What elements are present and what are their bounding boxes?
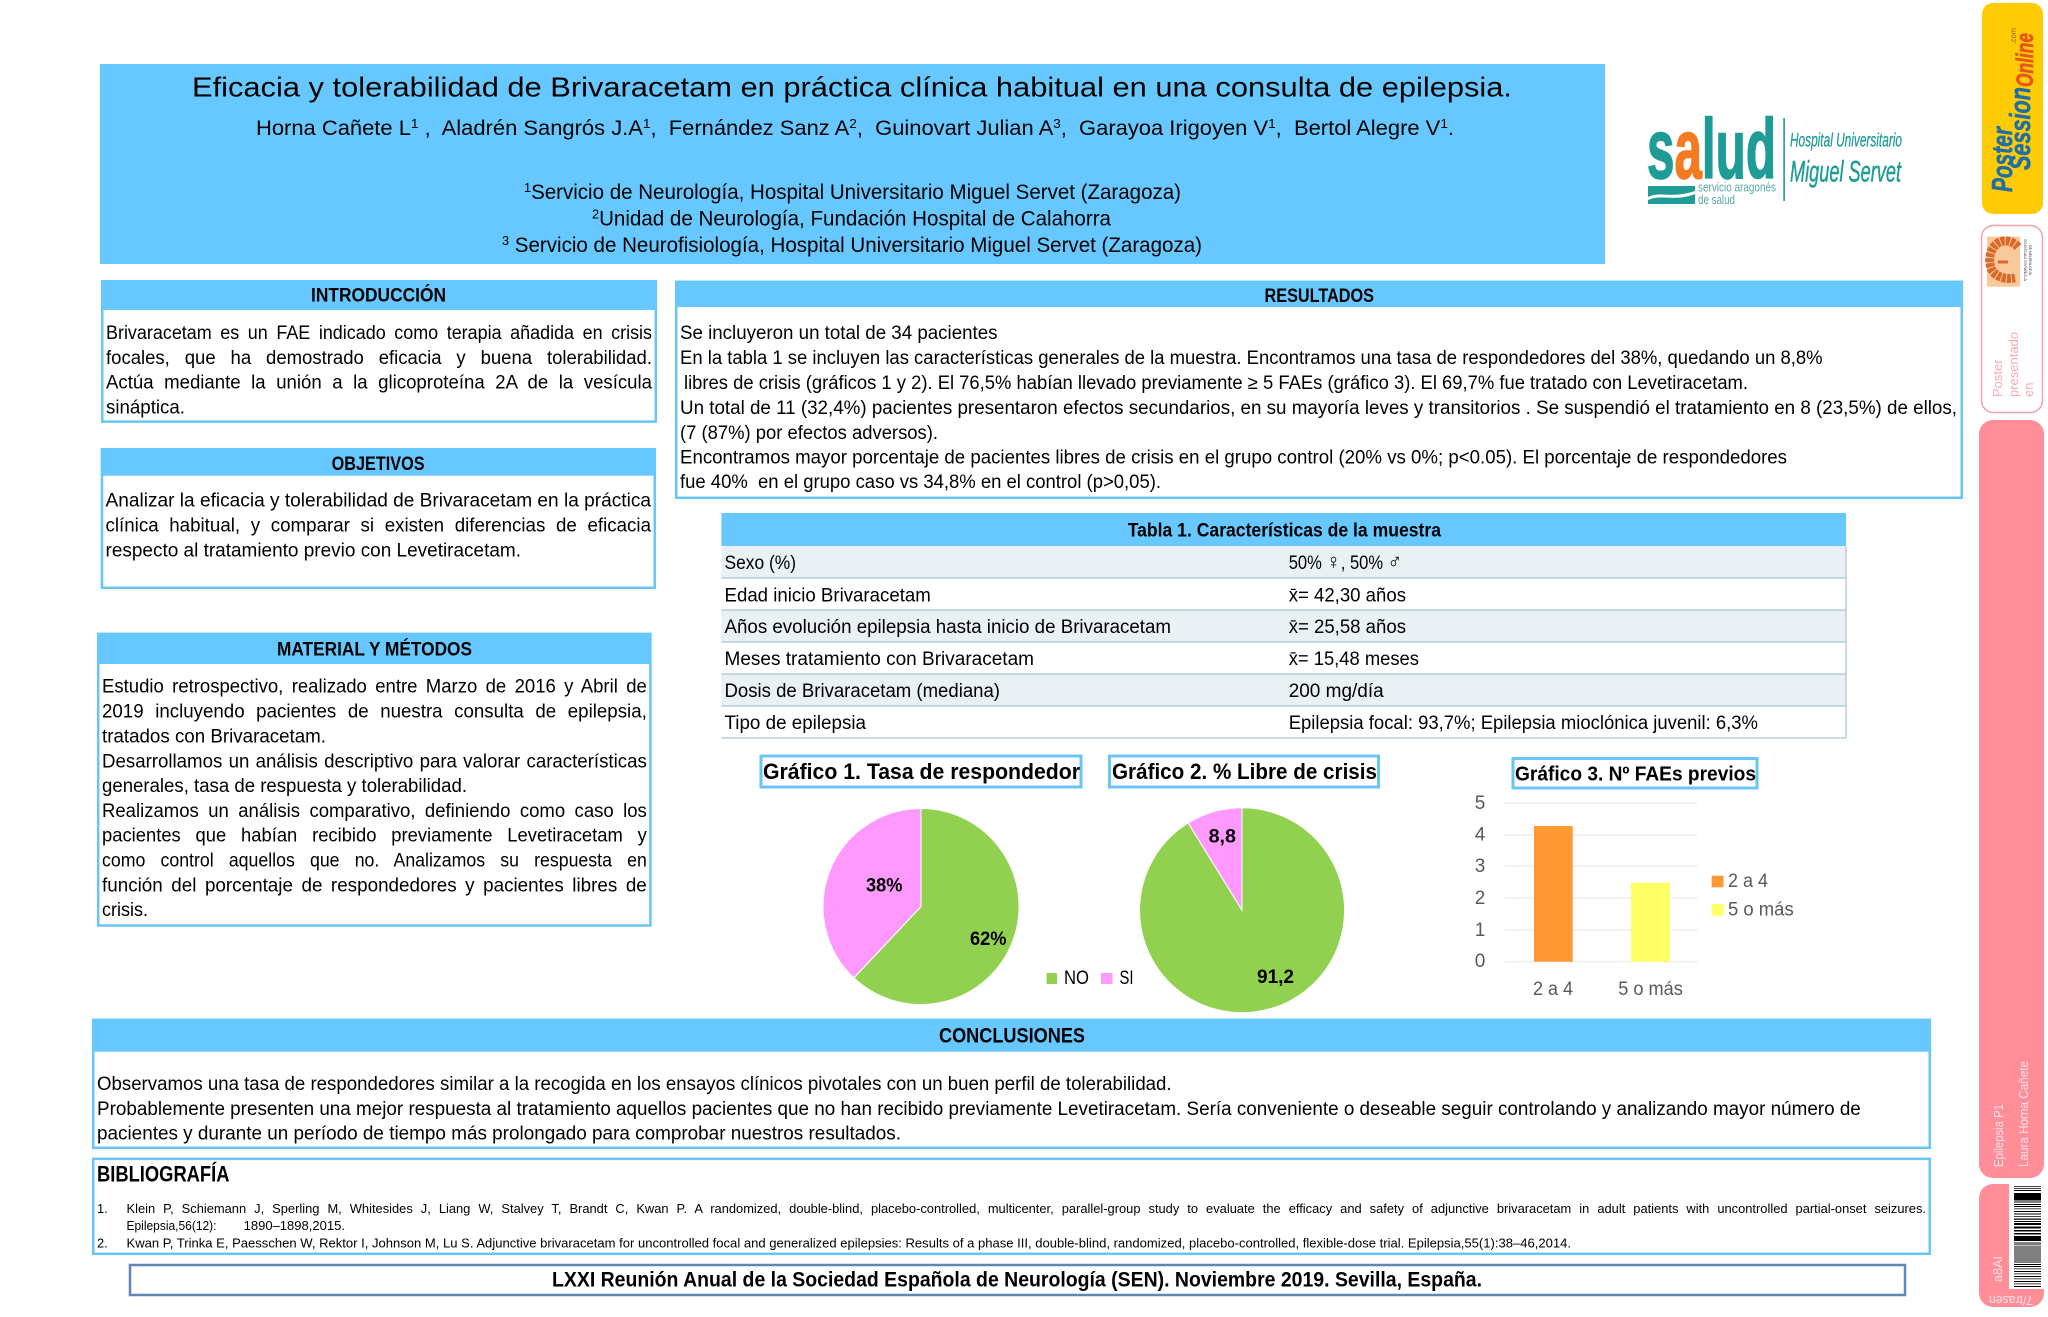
- text: objetivos: respecto al tratamiento previo con Levetiracetam.: [106, 541, 521, 562]
- table row: meses: Meses tratamiento con Brivaracetam: [724, 649, 1034, 670]
- affiliation 2: Unidad de Neurología, Fundación Hospital de Calahorra: [599, 208, 1111, 231]
- table row: sexo: [724, 549, 1402, 574]
- authors: 1: [643, 116, 650, 131]
- table row: edad: [724, 586, 1406, 607]
- y axis labels: 2: [1475, 888, 1485, 909]
- text: material y métodos: 2019 incluyendo pacientes de nuestra consulta de epilepsia,: [102, 702, 647, 723]
- footer: congress banner: LXXI Reunión Anual de la Sociedad Española de Neurología (SEN). Noviembre 2019. Sevilla, España.: [552, 1269, 1482, 1292]
- heading: gráfico 1: Gráfico 1. Tasa de respondedor: [763, 759, 1080, 784]
- authors: 1: [1268, 116, 1276, 131]
- pie legend: SI: [1120, 968, 1134, 989]
- pie legend: [1047, 968, 1134, 989]
- text: material y métodos: Realizamos un análisis comparativo, definiendo como caso los: [102, 801, 647, 822]
- authors: , Fernández Sanz A: [650, 117, 849, 140]
- authors: 2: [849, 116, 857, 131]
- bar chart: FAEs previos: [1475, 793, 1794, 1000]
- table row: tipo: Epilepsia focal: 93,7%; Epilepsia mioclónica juvenil: 6,3%: [1289, 713, 1758, 734]
- reference 2: 2.: [97, 1236, 108, 1251]
- panel: resultados: [675, 281, 1963, 498]
- table row: tipo: [724, 713, 1758, 734]
- sidebar tab: PosterSessionOnline: Session: [2005, 87, 2037, 170]
- panel: bibliografía: [93, 1159, 1930, 1254]
- y axis labels: 4: [1475, 825, 1486, 846]
- text: introducción: Brivaracetam es un FAE indicado como terapia añadida en crisis: [106, 323, 652, 344]
- table row: tipo: Tipo de epilepsia: [724, 713, 866, 734]
- sidebar tab: PosterSessionOnline: [1982, 3, 2043, 214]
- affiliation 1: Servicio de Neurología, Hospital Universitario Miguel Servet (Zaragoza): [531, 181, 1181, 204]
- y axis labels: 1: [1475, 920, 1485, 941]
- logo: salud Hospital Universitario Miguel Servet: [1647, 102, 1902, 207]
- y axis labels: 0: [1475, 951, 1485, 972]
- affiliation 3: Servicio de Neurofisiología, Hospital Universitario Miguel Servet (Zaragoza): [509, 234, 1202, 257]
- pie 1 label: 62%: 62%: [970, 929, 1007, 950]
- authors: 1: [411, 116, 418, 131]
- y axis labels: 3: [1475, 856, 1485, 877]
- sidebar tab: session and author: Epilepsia P1: [1991, 1104, 2006, 1167]
- table row: años evolución: Años evolución epilepsia hasta inicio de Brivaracetam: [724, 617, 1171, 638]
- panel: introducción: [101, 280, 657, 422]
- pie 2 label: 91,2: 91,2: [1257, 967, 1294, 988]
- pie 2 label: 8,8: 8,8: [1209, 827, 1236, 848]
- text: material y métodos: crisis.: [102, 900, 148, 921]
- text: objetivos: [106, 491, 651, 562]
- heading: gráfico 3: Gráfico 3. Nº FAEs previos: [1515, 764, 1756, 786]
- authors: , Bertol Alegre V: [1276, 117, 1440, 140]
- text: poster presentado en: [1990, 332, 2036, 397]
- x axis labels: 5 o más: [1618, 979, 1683, 1000]
- table row: dosis: Dosis de Brivaracetam (mediana): [724, 681, 1000, 702]
- barcode bars: [2014, 1186, 2041, 1287]
- bar: 2 a 4: [1534, 826, 1573, 962]
- table 1: características de la muestra: [721, 513, 1846, 738]
- table row: sexo: Sexo (%): [724, 553, 796, 574]
- text: introducción: focales, que ha demostrado eficacia y buena tolerabilidad.: [106, 348, 652, 369]
- text: material y métodos: Desarrollamos un análisis descriptivo para valorar características: [102, 751, 647, 772]
- authors: , Guinovart Julian A: [857, 117, 1053, 140]
- pie chart 1: [823, 808, 1019, 1004]
- text: resultados: Encontramos mayor porcentaje de pacientes libres de crisis en el grupo control (20% vs 0%; p<0.05). El porcentaje de respondedores: [680, 448, 1787, 469]
- icon: society brain logo: SOCIEDAD ESPAÑOLA: [2023, 239, 2028, 282]
- text: material y métodos: generales, tasa de respuesta y tolerabilidad.: [102, 776, 467, 797]
- x axis labels: [1533, 979, 1683, 1000]
- sidebar tab: barcode: 7/trasen: [1989, 1293, 2033, 1308]
- text: resultados: Se incluyeron un total de 34 pacientes: [680, 323, 998, 344]
- heading: bibliografía: BIBLIOGRAFÍA: [97, 1162, 230, 1187]
- authors: , Aladrén Sangrós J.A: [418, 117, 643, 140]
- heading: conclusiones: CONCLUSIONES: [939, 1025, 1085, 1048]
- affiliation 1: 1: [524, 180, 531, 195]
- reference 1: [97, 1201, 1926, 1233]
- bar legend: 2 a 4: [1728, 871, 1768, 892]
- text: introducción: [106, 323, 652, 418]
- pie legend: NO: [1064, 968, 1089, 989]
- text: resultados: En la tabla 1 se incluyen las características generales de la muestra. Encontramos una tasa de respondedores del 38%, quedando un 8,8%: [680, 348, 1823, 369]
- reference 2: Kwan P, Trinka E, Paesschen W, Rektor I, Johnson M, Lu S. Adjunctive brivaracetam for uncontrolled focal and generalized epilepsies: Results of a phase III, double-blind, randomized, placebo-controlled, flexible-dose trial. Epilepsia,55(1):38–46,2014.: [126, 1236, 1571, 1251]
- logo: salud Hospital Universitario Miguel Servet: servicio aragonés: [1698, 180, 1776, 195]
- text: resultados: fue 40% en el grupo caso vs 34,8% en el control (p>0,05).: [680, 472, 1161, 493]
- text: material y métodos: función del porcentaje de respondedores y pacientes libres de: [102, 875, 647, 896]
- heading: objetivos: OBJETIVOS: [332, 454, 425, 475]
- authors: 1: [1440, 116, 1448, 131]
- table row: dosis: [724, 681, 1384, 702]
- text: objetivos: Analizar la eficacia y tolerabilidad de Brivaracetam en la práctica: [106, 491, 651, 512]
- text: introducción: sináptica.: [106, 397, 185, 418]
- text: resultados: [680, 323, 1957, 493]
- sidebar tab: barcode: [1979, 1184, 2044, 1308]
- sidebar tab: barcode: a8AI: [1990, 1256, 2005, 1282]
- text: introducción: Actúa mediante la unión a la glicoproteína 2A de la vesícula: [106, 373, 652, 394]
- sidebar tab: PosterSessionOnline: .com: [2009, 28, 2018, 44]
- text: material y métodos: como control aquellos que no. Analizamos su respuesta en: [102, 851, 647, 872]
- y axis labels: [1475, 793, 1486, 972]
- text: poster presentado en: en: [2021, 383, 2036, 397]
- sidebar tab: poster presentado en: [1982, 226, 2042, 412]
- text: resultados: Un total de 11 (32,4%) pacientes presentaron efectos secundarios, en su mayoría leves y transitorios . Se suspendió el tratamiento en 8 (23,5%) de ellos,: [680, 398, 1957, 419]
- text: poster presentado en: presentado: [2006, 332, 2021, 397]
- text: resultados: (7 (87%) por efectos adversos).: [680, 423, 938, 444]
- logo: salud Hospital Universitario Miguel Servet: Hospital Universitario: [1790, 131, 1902, 152]
- title: Eficacia y tolerabilidad de Brivaracetam en práctica clínica habitual en una consulta de epilepsia.: [192, 72, 1512, 103]
- table row: dosis: 200 mg/día: [1289, 681, 1384, 702]
- panel: material y métodos: [97, 633, 652, 926]
- text: material y métodos: tratados con Brivaracetam.: [102, 726, 326, 747]
- logo: salud Hospital Universitario Miguel Servet: salud: [1647, 102, 1776, 196]
- text: conclusiones: Observamos una tasa de respondedores similar a la recogida en los ensayos clínicos pivotales con un buen perfil de tolerabilidad.: [97, 1074, 1172, 1095]
- icon: society brain logo: [1987, 237, 2032, 287]
- reference 1: 1.: [97, 1201, 108, 1216]
- footer: congress banner: [130, 1265, 1905, 1295]
- text: conclusiones: [97, 1074, 1861, 1145]
- affiliation 3: 3: [502, 233, 509, 248]
- x axis labels: 2 a 4: [1533, 979, 1573, 1000]
- bar legend: 5 o más: [1728, 900, 1794, 921]
- icon: society brain logo: DE NEUROLOGÍA: [2028, 245, 2032, 276]
- authors: .: [1448, 117, 1454, 140]
- heading: gráfico 2: Gráfico 2. % Libre de crisis: [1112, 759, 1377, 784]
- sidebar tab: PosterSessionOnline: Poster: [1987, 126, 2019, 192]
- bar legend: [1712, 871, 1794, 921]
- heading: material y métodos: MATERIAL Y MÉTODOS: [277, 639, 472, 661]
- text: conclusiones: Probablemente presenten una mejor respuesta al tratamiento aquellos pacientes que no han recibido previamente Levetiracetam. Sería conveniente o deseable seguir controlando y analizando mayor número de: [97, 1099, 1861, 1120]
- text: material y métodos: [102, 677, 647, 921]
- logo: salud Hospital Universitario Miguel Servet: de salud: [1698, 192, 1735, 207]
- authors: 3: [1053, 116, 1061, 131]
- table row: años evolución: [724, 617, 1406, 638]
- sidebar tab: session and author: [1979, 420, 2044, 1178]
- panel: conclusiones: [92, 1019, 1931, 1148]
- reference 1: 1890–1898,2015.: [244, 1218, 345, 1233]
- logo: salud Hospital Universitario Miguel Servet: Miguel Servet: [1790, 156, 1902, 189]
- sidebar tab: PosterSessionOnline: Online: [2012, 33, 2039, 87]
- text: material y métodos: Estudio retrospectivo, realizado entre Marzo de 2016 y Abril de: [102, 677, 647, 698]
- heading: resultados: RESULTADOS: [1264, 286, 1374, 307]
- text: poster presentado en: Poster: [1990, 359, 2005, 397]
- affiliation 2: 2: [592, 207, 599, 222]
- table row: meses: x̄= 15,48 meses: [1289, 649, 1419, 670]
- text: objetivos: clínica habitual, y comparar si existen diferencias de eficacia: [106, 516, 651, 537]
- text: resultados: libres de crisis (gráficos 1 y 2). El 76,5% habían llevado previamente ≥ 5 FAEs (gráfico 3). El 69,7% fue tratado con Levetiracetam.: [684, 373, 1748, 394]
- sidebar tab: session and author: Laura Horna Cañete: [2016, 1061, 2031, 1167]
- text: material y métodos: pacientes que habían recibido previamente Levetiracetam y: [102, 826, 647, 847]
- header banner: [100, 64, 1605, 264]
- pie chart 2: [1140, 808, 1345, 1013]
- table row: sexo: 50% ♀, 50% ♂: [1289, 549, 1402, 574]
- authors: Horna Cañete L: [256, 117, 404, 140]
- table row: años evolución: x̄= 25,58 años: [1289, 617, 1406, 638]
- bar: 5 o más: [1631, 883, 1670, 962]
- table row: edad: Edad inicio Brivaracetam: [724, 586, 931, 607]
- pie 1 label: 38%: 38%: [866, 876, 903, 897]
- table row: edad: x̄= 42,30 años: [1289, 586, 1406, 607]
- y axis labels: 5: [1475, 793, 1485, 814]
- text: conclusiones: pacientes y durante un período de tiempo más prolongado para comprobar nuestros resultados.: [97, 1124, 901, 1145]
- reference 1: Epilepsia,56(12):: [126, 1218, 216, 1233]
- panel: objetivos: [101, 448, 656, 588]
- table row: meses: [724, 649, 1419, 670]
- table title: Tabla 1. Características de la muestra: [1128, 521, 1441, 542]
- reference 1: Klein P, Schiemann J, Sperling M, Whitesides J, Liang W, Stalvey T, Brandt C, Kwan P. A randomized, double-blind, placebo-controlled, multicenter, parallel-group study to evaluate the efficacy and safety of adjunctive brivaracetam in adult patients with uncontrolled partial-onset seizures.: [126, 1201, 1926, 1216]
- heading: introducción: INTRODUCCIÓN: [311, 285, 446, 307]
- authors: , Garayoa Irigoyen V: [1061, 117, 1268, 140]
